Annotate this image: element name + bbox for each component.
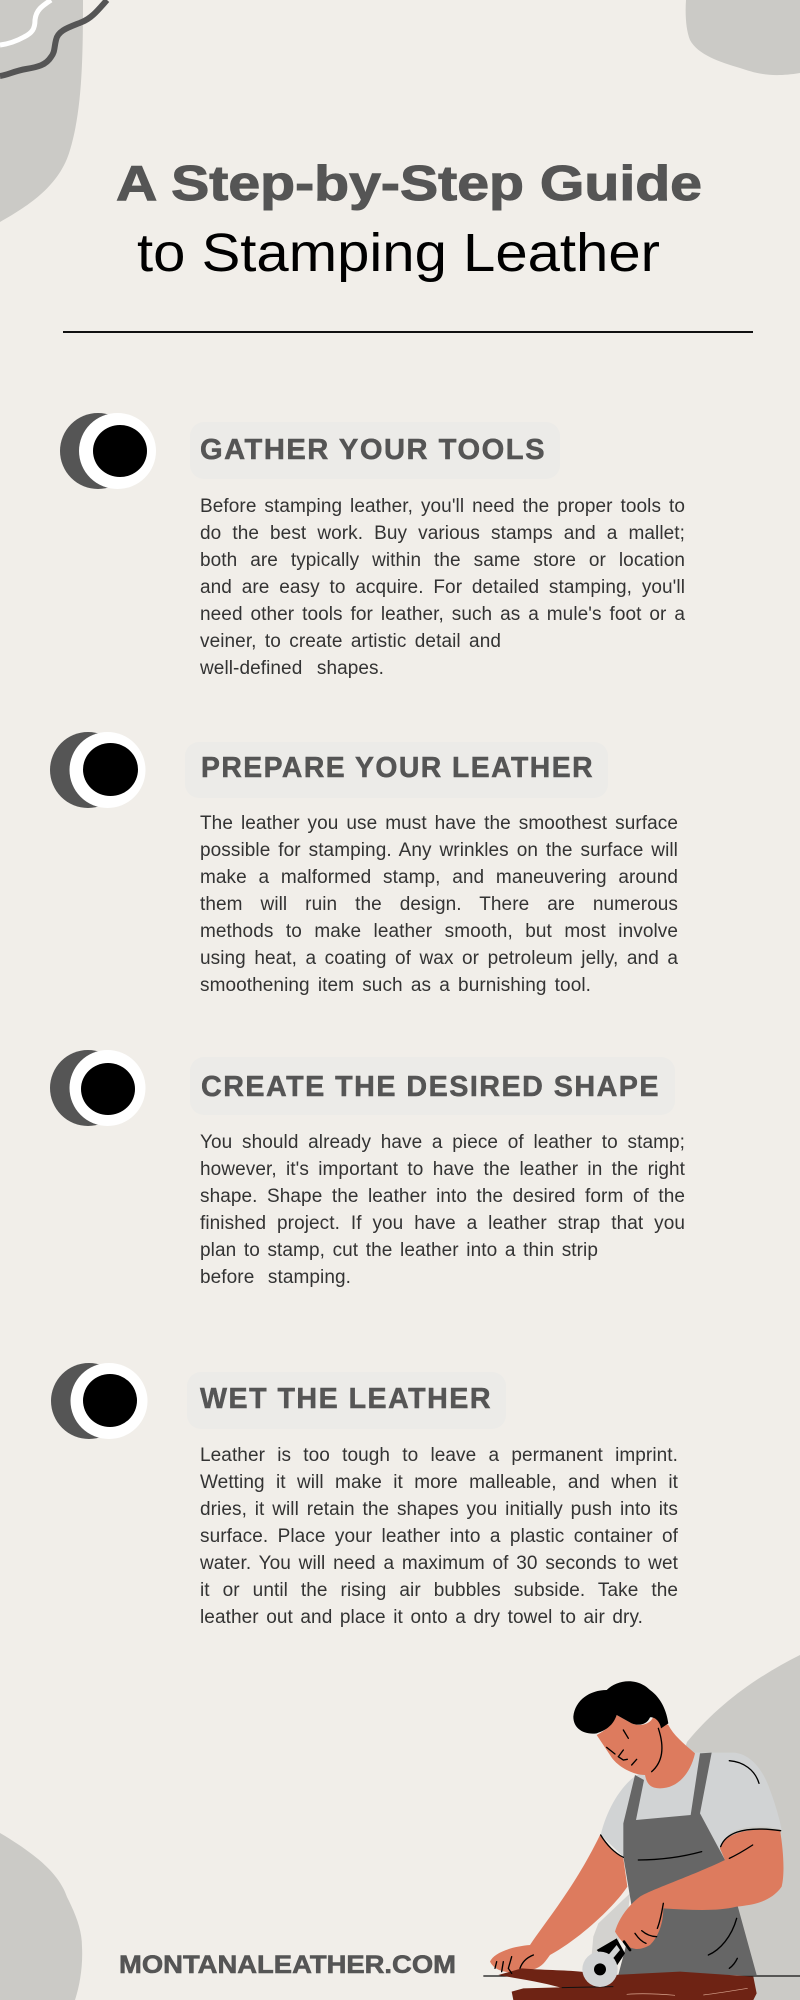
text block: step 4: dries, it will retain the shapes you initially push into its [200,1499,678,1520]
icon: step 3 circle marker [50,1050,146,1126]
text block: step 1 [200,496,685,679]
text block: step 4: Wetting it will make it more malleable, and when it [200,1472,678,1493]
panel: step 1 gather your tools [60,413,685,679]
text block: step 2: smoothening item such as a burnishing tool. [200,975,591,996]
text block: step 3: shape. Shape the leather into the desired form of the [200,1186,685,1207]
text block: step 3: plan to stamp, cut the leather into a thin strip [200,1240,598,1261]
line details [495,1728,781,1973]
text block: step 1: well-defined shapes. [200,658,384,679]
leather cut line [562,1987,613,1988]
text block: step 2 [200,813,678,996]
rotary tool [582,1938,625,1987]
heading: gather your tools: GATHER YOUR TOOLS [200,434,546,466]
text block: step 1: veiner, to create artistic detail and [200,631,501,652]
icon: step 4 circle marker [51,1363,148,1439]
heading: prepare your leather: PREPARE YOUR LEATHER [201,752,594,784]
bottom-right decorative blob [686,1655,800,2000]
heading: create the desired shape [190,1057,675,1115]
heading: prepare your leather [185,742,608,798]
heading: wet the leather: WET THE LEATHER [200,1383,492,1415]
text block: step 1: Before stamping leather, you'll need the proper tools to [200,496,685,517]
icon: step 1 circle marker [60,413,156,489]
text block: step 2: possible for stamping. Any wrinkles on the surface will [200,840,678,861]
website footer text: MONTANALEATHER.COM [119,1951,456,1979]
text block: step 2: methods to make leather smooth, but most involve [200,921,678,942]
leather highlights [627,1988,748,1995]
neck and face [597,1715,695,1788]
light garment behind arm [592,1893,630,1957]
panel: step 3 create the desired shape [50,1050,685,1288]
title divider line [63,331,753,333]
title: A Step-by-Step Guide [116,157,702,211]
text block: step 2: them will ruin the design. There are numerous [200,894,678,915]
apron [618,1753,757,1975]
text block: step 3: finished project. If you have a leather strap that you [200,1213,685,1234]
text block: step 4 [200,1445,678,1628]
title: to Stamping Leather [137,223,660,283]
title [116,157,702,283]
text block: step 1: do the best work. Buy various stamps and a mallet; [200,523,685,544]
text block: step 4: Leather is too tough to leave a permanent imprint. [200,1445,678,1466]
top-right decorative blob [686,0,800,76]
text block: step 2: make a malformed stamp, and maneuvering around [200,867,678,888]
text block: step 1: need other tools for leather, such as a mule's foot or a [200,604,685,625]
right arm and hand [615,1829,783,1949]
panel: step 2 prepare your leather [50,732,678,996]
icon: step 2 circle marker [50,732,146,808]
text block: step 1: both are typically within the same store or location [200,550,685,571]
top-left decorative blob with wavy lines [0,0,110,222]
text block: step 3: You should already have a piece of leather to stamp; [200,1132,685,1153]
text block: step 4: surface. Place your leather into a plastic container of [200,1526,678,1547]
text block: step 4: it or until the rising air bubbles subside. Take the [200,1580,678,1601]
text block: step 1: and are easy to acquire. For detailed stamping, you'll [200,577,685,598]
panel: step 4 wet the leather [51,1363,678,1628]
text block: step 2: The leather you use must have the smoothest surface [200,813,678,834]
shirt [601,1753,782,1860]
illustration: leatherworker cutting leather [483,1681,800,2000]
heading: wet the leather [187,1372,506,1429]
heading: gather your tools [190,422,560,479]
text block: step 3: before stamping. [200,1267,351,1288]
left arm [490,1835,627,1972]
leather piece [498,1968,757,2000]
text block: step 4: water. You will need a maximum of 30 seconds to wet [200,1553,678,1574]
text block: step 3 [200,1132,685,1288]
bottom-left decorative blob [0,1833,82,2000]
text block: step 4: leather out and place it onto a dry towel to air dry. [200,1607,643,1628]
hair [573,1681,668,1734]
text block: step 3: however, it's important to have the leather in the right [200,1159,685,1180]
heading: create the desired shape: CREATE THE DESIRED SHAPE [201,1071,660,1103]
text block: step 2: using heat, a coating of wax or petroleum jelly, and a [200,948,678,969]
table line [483,1974,800,1978]
